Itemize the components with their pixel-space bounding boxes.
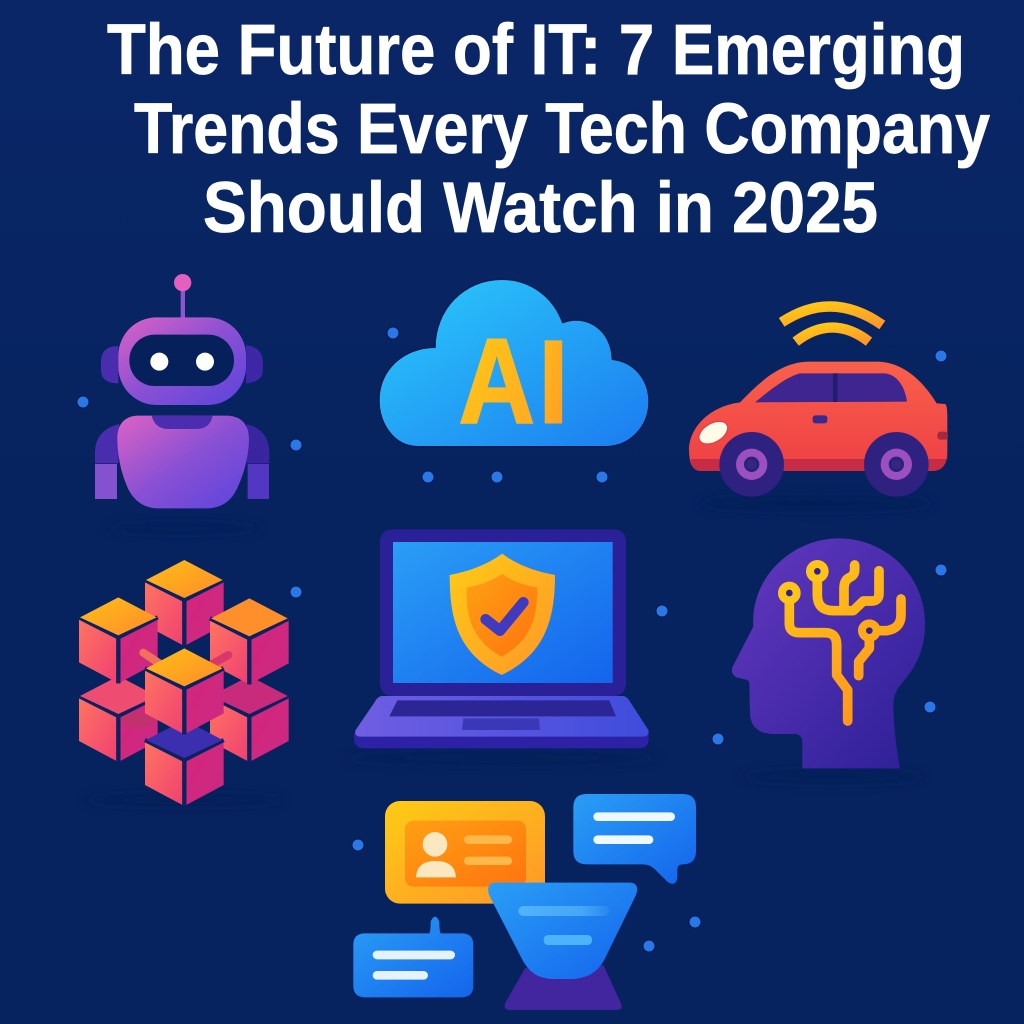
title: Should Watch in 2025 [203,169,878,248]
icon: AI cloud: A [459,313,535,449]
icon: laptop with security shield [345,529,658,763]
icon: head with neural circuit [732,538,925,782]
icon: AI cloud [379,279,649,449]
icon: chat and profile cards [353,794,696,1010]
title [107,11,990,248]
speech bubble bottom left [353,917,473,997]
profile card [385,801,545,904]
cloud accent dots [387,327,608,483]
blockchain accent dot [290,586,302,598]
laptop accent dot [656,605,668,617]
robot accent dots [77,396,302,451]
head accent dots [712,564,947,745]
car accent dot [935,350,947,362]
icon: connected car [689,306,948,509]
speech bubble top right [573,794,696,884]
icon: blockchain cubes [79,560,289,806]
icon: robot [95,274,269,532]
chat accent dots [352,839,701,952]
icon: AI cloud: I [537,313,570,449]
funnel [488,883,637,1010]
